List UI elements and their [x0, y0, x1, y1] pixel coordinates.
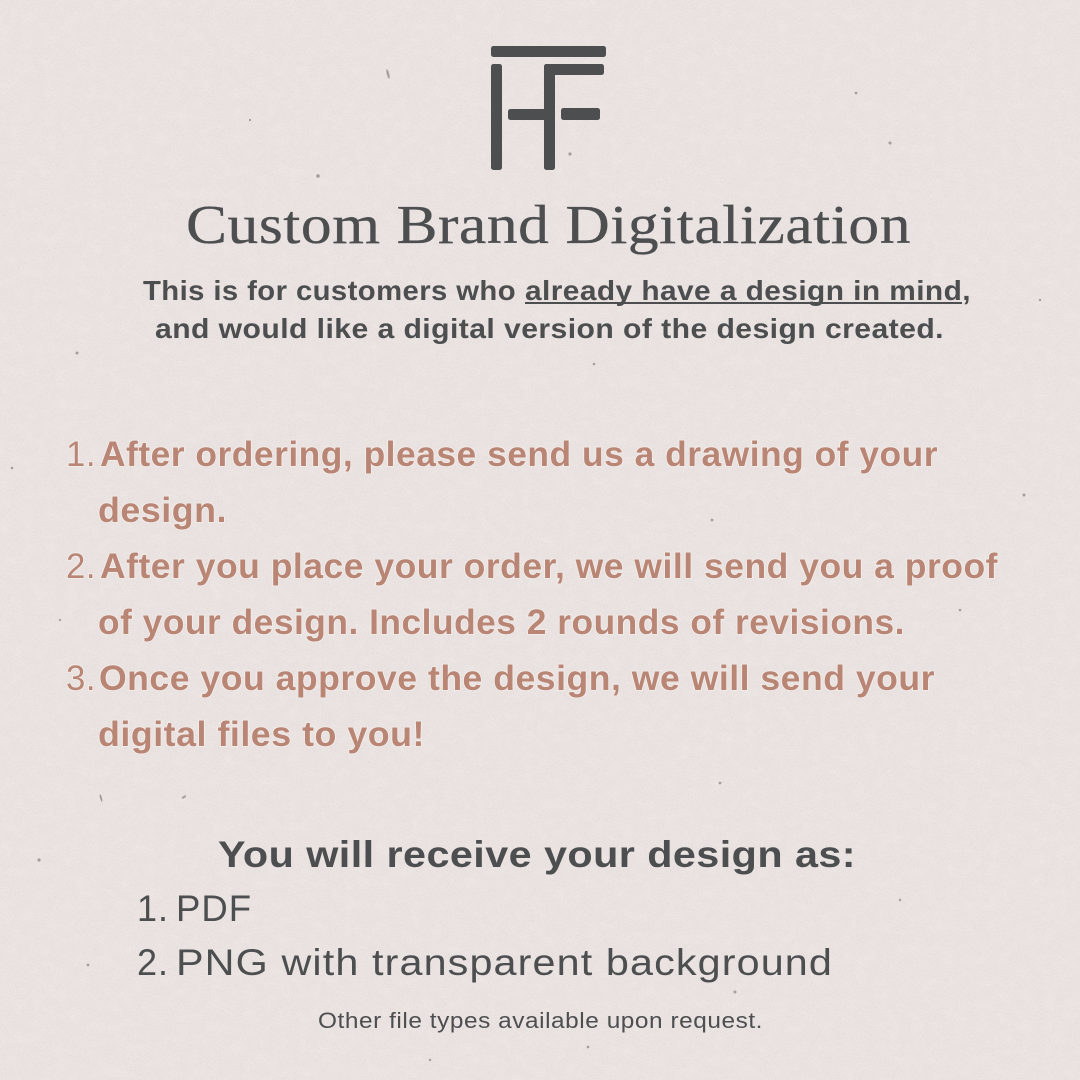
step 3	[66, 659, 935, 754]
step 2: of your design. Includes 2 rounds of revisions.	[98, 603, 905, 642]
footnote: Other file types available upon request.	[318, 1008, 763, 1033]
file format list: PDF	[176, 888, 252, 929]
step 3: digital files to you!	[98, 715, 425, 754]
step 1	[66, 435, 938, 530]
step 1: After ordering, please send us a drawing of your	[100, 435, 938, 474]
file format list: 1.	[137, 888, 169, 929]
step 3: Once you approve the design, we will send your	[99, 659, 935, 698]
intro text	[143, 275, 971, 344]
step 2	[66, 547, 998, 642]
receive heading: You will receive your design as:	[218, 834, 856, 875]
intro text: already have a design in mind,	[525, 275, 971, 306]
file format list: 2.	[137, 942, 169, 983]
file format list	[137, 888, 833, 983]
step 2: After you place your order, we will send you a proof	[100, 547, 998, 586]
intro text: and would like a digital version of the design created.	[155, 313, 944, 344]
intro text: This is for customers who	[143, 275, 516, 306]
title: Custom Brand Digitalization	[186, 194, 911, 255]
step 1: design.	[98, 491, 227, 530]
logo: HF monogram	[491, 46, 606, 170]
numbered steps	[66, 435, 998, 754]
step 3: 3.	[66, 659, 96, 698]
step 2: 2.	[66, 547, 96, 586]
file format list: PNG with transparent background	[176, 942, 833, 983]
step 1: 1.	[66, 435, 96, 474]
